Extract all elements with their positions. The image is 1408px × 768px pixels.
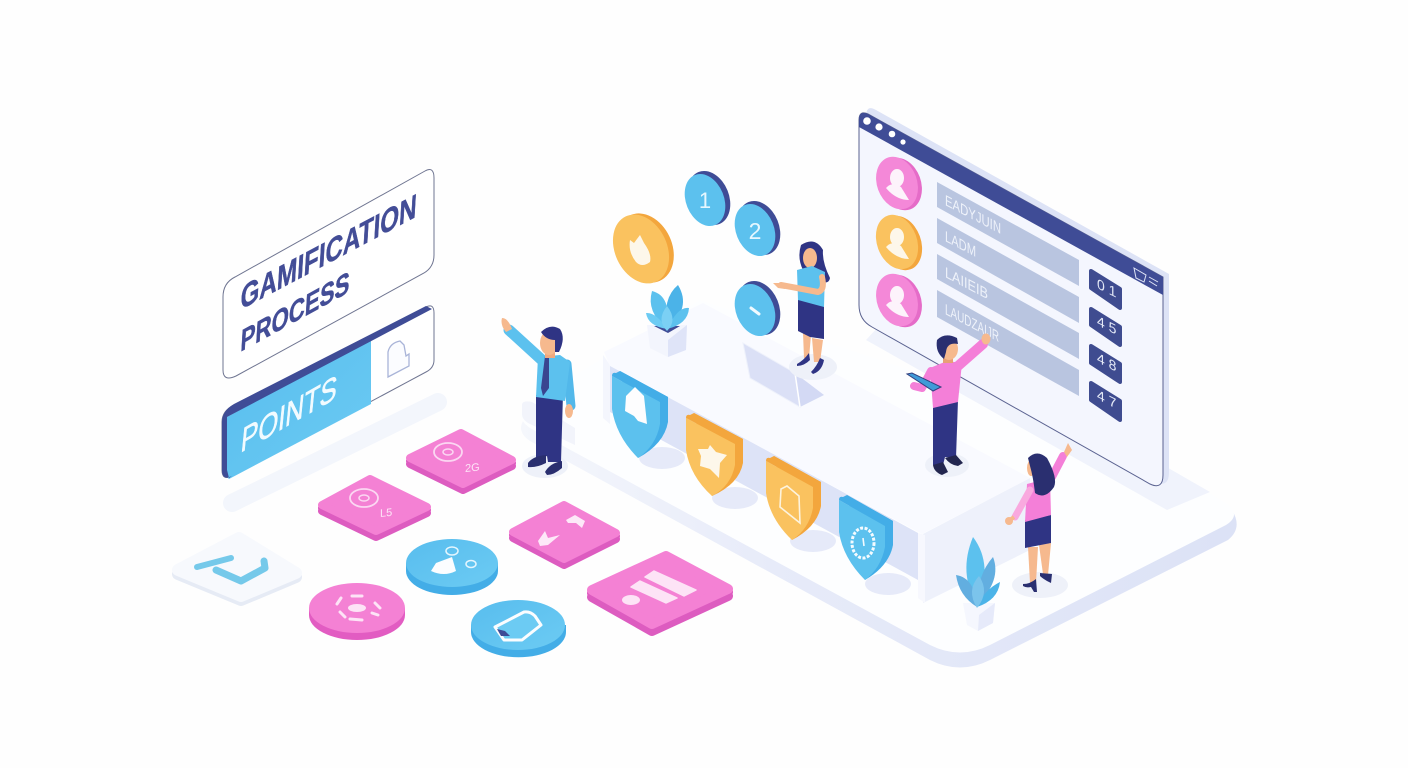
avatar: orange [869, 209, 929, 276]
person: woman presenter [773, 241, 837, 380]
title text [240, 186, 418, 359]
coin: number two [727, 195, 788, 262]
plant on base [956, 537, 1000, 631]
person: woman reaching [1005, 443, 1072, 598]
score tiles: 4 7 [1097, 388, 1116, 412]
title text: GAMIFICATION [240, 186, 418, 317]
leaderboard rows: LADM [945, 229, 976, 261]
leaderboard rows: EADYJUIN [945, 193, 1001, 238]
tile: top pink [410, 433, 512, 490]
shield: orange house outline [766, 456, 821, 540]
screen base shadow [866, 325, 1210, 510]
token: white tile [178, 538, 296, 600]
avatar: pink two [869, 268, 929, 333]
shield: blue gear [839, 495, 893, 580]
coin: dash [727, 275, 788, 342]
score tiles: 4 5 [1097, 314, 1116, 338]
leaderboard screen [859, 108, 1169, 486]
tile: top pink: 2G [465, 462, 480, 475]
score tiles: 0 1 [1097, 277, 1116, 301]
platform base [521, 300, 1237, 668]
coin: number one: 1 [699, 188, 711, 213]
pale strip under points card [232, 402, 438, 503]
floating coins [602, 165, 788, 342]
potted plant on desk [646, 285, 689, 357]
score tiles [1091, 271, 1120, 420]
icon: lock outline [388, 341, 409, 377]
person: man with tie [502, 318, 573, 478]
shield badges [612, 371, 911, 595]
token: center blue disc [406, 539, 498, 595]
tile: big pink with bars [592, 556, 728, 631]
shield: orange star [686, 413, 743, 496]
leaderboard rows [937, 182, 1079, 396]
coin: orange badge [602, 204, 685, 293]
window title bar [859, 113, 1163, 295]
tile: second pink: L5 [380, 507, 392, 520]
tile: pink arrows [513, 505, 616, 565]
token: lower blue disc [471, 600, 566, 657]
shield shadows [639, 447, 911, 595]
points card [222, 306, 434, 479]
title card [223, 170, 434, 378]
desk stage [603, 303, 1030, 603]
tile: second pink [322, 479, 427, 537]
leaderboard rows: LAUDZAIJR [945, 302, 999, 346]
avatar: pink one [869, 151, 929, 216]
score tiles: 4 8 [1097, 351, 1116, 375]
title text: PROCESS [240, 265, 351, 359]
token: pink disc [309, 583, 405, 640]
person: man with tablet [907, 334, 990, 477]
shield: blue house [612, 371, 668, 458]
coin: number two: 2 [749, 218, 761, 244]
points label: POINTS [239, 368, 339, 461]
leaderboard rows: LAIIEIB [945, 265, 988, 303]
coin: number one [677, 165, 738, 232]
game tiles and tokens [178, 433, 728, 657]
laptop on desk [743, 343, 824, 407]
